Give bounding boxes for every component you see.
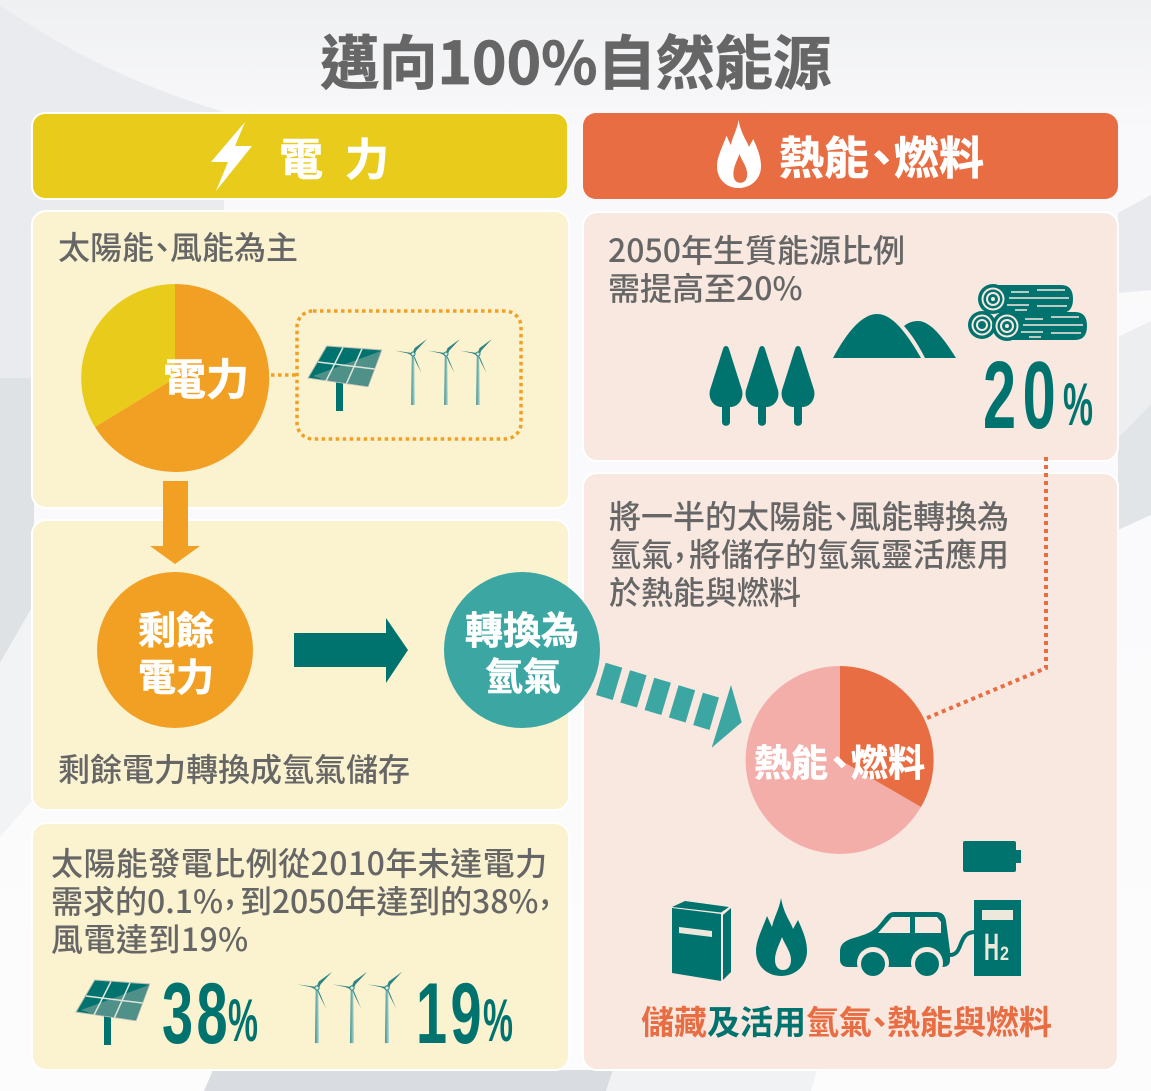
icon: storage tank (672, 901, 731, 981)
icon: flame (717, 120, 761, 188)
text: half converted: 將一半的太陽能、風能轉換為 (609, 492, 1009, 538)
icon: hydrogen car (840, 912, 975, 979)
heading: electricity: 電 力 (279, 124, 389, 188)
stat: 38%: % (228, 987, 258, 1054)
icon: lightning (211, 122, 252, 191)
text: storage and use: 儲藏及活用氫氣、熱能與燃料 (641, 996, 1052, 1044)
text: share description: 需求的0.1% (51, 877, 223, 923)
text: biomass goal (608, 226, 905, 310)
pie chart: electricity (81, 284, 269, 472)
stat: 19% (416, 966, 513, 1062)
icon: hydrogen pump: H (984, 927, 999, 969)
icon: wind turbines (298, 972, 402, 1043)
panel: solar and wind share (32, 823, 569, 1070)
text: half converted: , (675, 521, 685, 567)
text: share description: 到2050年達到的38% (240, 877, 538, 923)
icon: solar panel (308, 346, 382, 411)
title: 邁向100%自然能源 (321, 16, 831, 101)
stat: 20%: % (1063, 371, 1093, 438)
icon: trees (710, 346, 814, 426)
label: heat and fuel: 熱能、燃料 (754, 733, 925, 787)
text: half converted: 氫氣 (609, 530, 673, 576)
icon: solar panel (76, 980, 150, 1045)
text: half converted (609, 492, 1009, 614)
pie chart: heat and fuel (746, 666, 934, 854)
text: share description: 太陽能發電比例從2010年未達電力 (51, 839, 548, 885)
text: share description: , (540, 868, 550, 914)
circle: surplus electricity (97, 572, 253, 728)
text: solar and wind: 太陽能、風能為主 (58, 223, 298, 269)
label: electricity: 電力 (163, 346, 249, 408)
icon: hills (833, 314, 956, 358)
panel: heat and fuel header (583, 113, 1118, 199)
text: biomass goal: 2050年生質能源比例 (608, 226, 905, 272)
circle: convert to hydrogen: 轉換為 (465, 600, 579, 655)
text: share description: 風電達到19% (51, 915, 249, 961)
circle: convert to hydrogen (444, 572, 600, 728)
panel: electricity header (32, 113, 568, 199)
text: biomass goal: 需提高至20% (608, 264, 803, 310)
icon: hydrogen pump: 2 (1000, 944, 1009, 965)
heading: heat and fuel: 熱能、燃料 (779, 122, 984, 187)
stat: 19%: % (483, 987, 513, 1054)
stat: 20% (983, 341, 1093, 448)
text: share description (51, 839, 550, 961)
arrow: to hydrogen (294, 618, 408, 683)
dotted connector (927, 457, 1046, 718)
icon: flame (756, 898, 807, 976)
text: surplus converted: 剩餘電力轉換成氫氣儲存 (58, 745, 410, 791)
stat: 38% (162, 966, 258, 1062)
icon: logs (968, 284, 1087, 341)
arrow: striped teal (596, 663, 742, 748)
icon: battery (963, 841, 1021, 872)
circle: convert to hydrogen: 氫氣 (485, 646, 561, 701)
dotted connector and box (271, 311, 521, 439)
text: share description: , (225, 868, 235, 914)
stat: 19%: 19 (416, 966, 482, 1062)
icon: wind turbines (395, 339, 492, 405)
panel: solar and wind mainly (32, 211, 569, 508)
stat: 20%: 20 (983, 341, 1056, 448)
panel: heat and fuel use (583, 457, 1118, 1070)
text: half converted: 將儲存的氫氣靈活應用 (689, 530, 1009, 576)
panel: surplus electricity (32, 520, 569, 810)
circle: surplus electricity: 剩餘 (138, 600, 214, 655)
icon: hydrogen pump (974, 900, 1021, 976)
circle: surplus electricity: 電力 (138, 647, 214, 702)
text: half converted: 於熱能與燃料 (609, 568, 801, 614)
stat: 38%: 38 (162, 966, 228, 1062)
arrow: down (150, 481, 200, 564)
panel: biomass (583, 212, 1118, 461)
